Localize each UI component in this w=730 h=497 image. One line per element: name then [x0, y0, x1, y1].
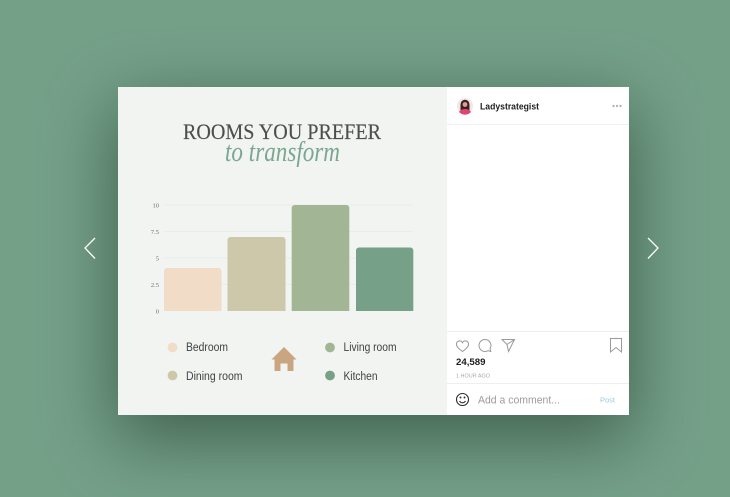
arrow: previous	[85, 238, 95, 258]
icon: comment	[479, 340, 491, 352]
username: Ladystrategist	[480, 102, 539, 112]
comment placeholder: Add a comment...	[478, 394, 560, 406]
title: ROOMS YOU PREFER	[183, 119, 381, 144]
axis labels: 5	[156, 256, 159, 262]
arrow: next	[648, 238, 658, 258]
bar: bedroom	[164, 268, 222, 311]
icon: heart	[456, 341, 468, 352]
post header	[457, 98, 622, 115]
likes count: 24,589	[456, 357, 486, 367]
legend: living room	[325, 342, 396, 354]
legend: kitchen	[325, 371, 378, 383]
icon: share	[502, 340, 514, 352]
legend: dining room: Dining room	[186, 371, 242, 383]
legend: dining room	[168, 371, 242, 383]
more menu	[612, 105, 622, 107]
axis labels: 0	[156, 308, 159, 316]
legend: kitchen: Kitchen	[344, 371, 378, 383]
icon: bookmark	[610, 338, 622, 352]
axis labels	[151, 202, 159, 316]
bar: living room	[292, 205, 349, 311]
bar: dining room	[228, 237, 286, 311]
panel: infographic post	[118, 87, 447, 415]
timestamp: 1 HOUR AGO	[456, 374, 491, 380]
axis labels: 10	[152, 202, 159, 210]
icon: house	[272, 347, 296, 371]
avatar	[457, 98, 473, 115]
post button: Post	[600, 396, 616, 404]
axis labels: 7.5	[151, 229, 159, 236]
legend: bedroom	[168, 342, 228, 354]
bar chart	[151, 202, 413, 316]
bar: kitchen	[356, 248, 413, 311]
axis labels: 2.5	[151, 282, 159, 289]
panel: social sidebar	[447, 87, 629, 415]
icon: smiley	[456, 394, 468, 406]
script subtitle: to transform	[225, 137, 340, 168]
legend: bedroom: Bedroom	[186, 342, 228, 354]
legend: living room: Living room	[344, 342, 396, 354]
